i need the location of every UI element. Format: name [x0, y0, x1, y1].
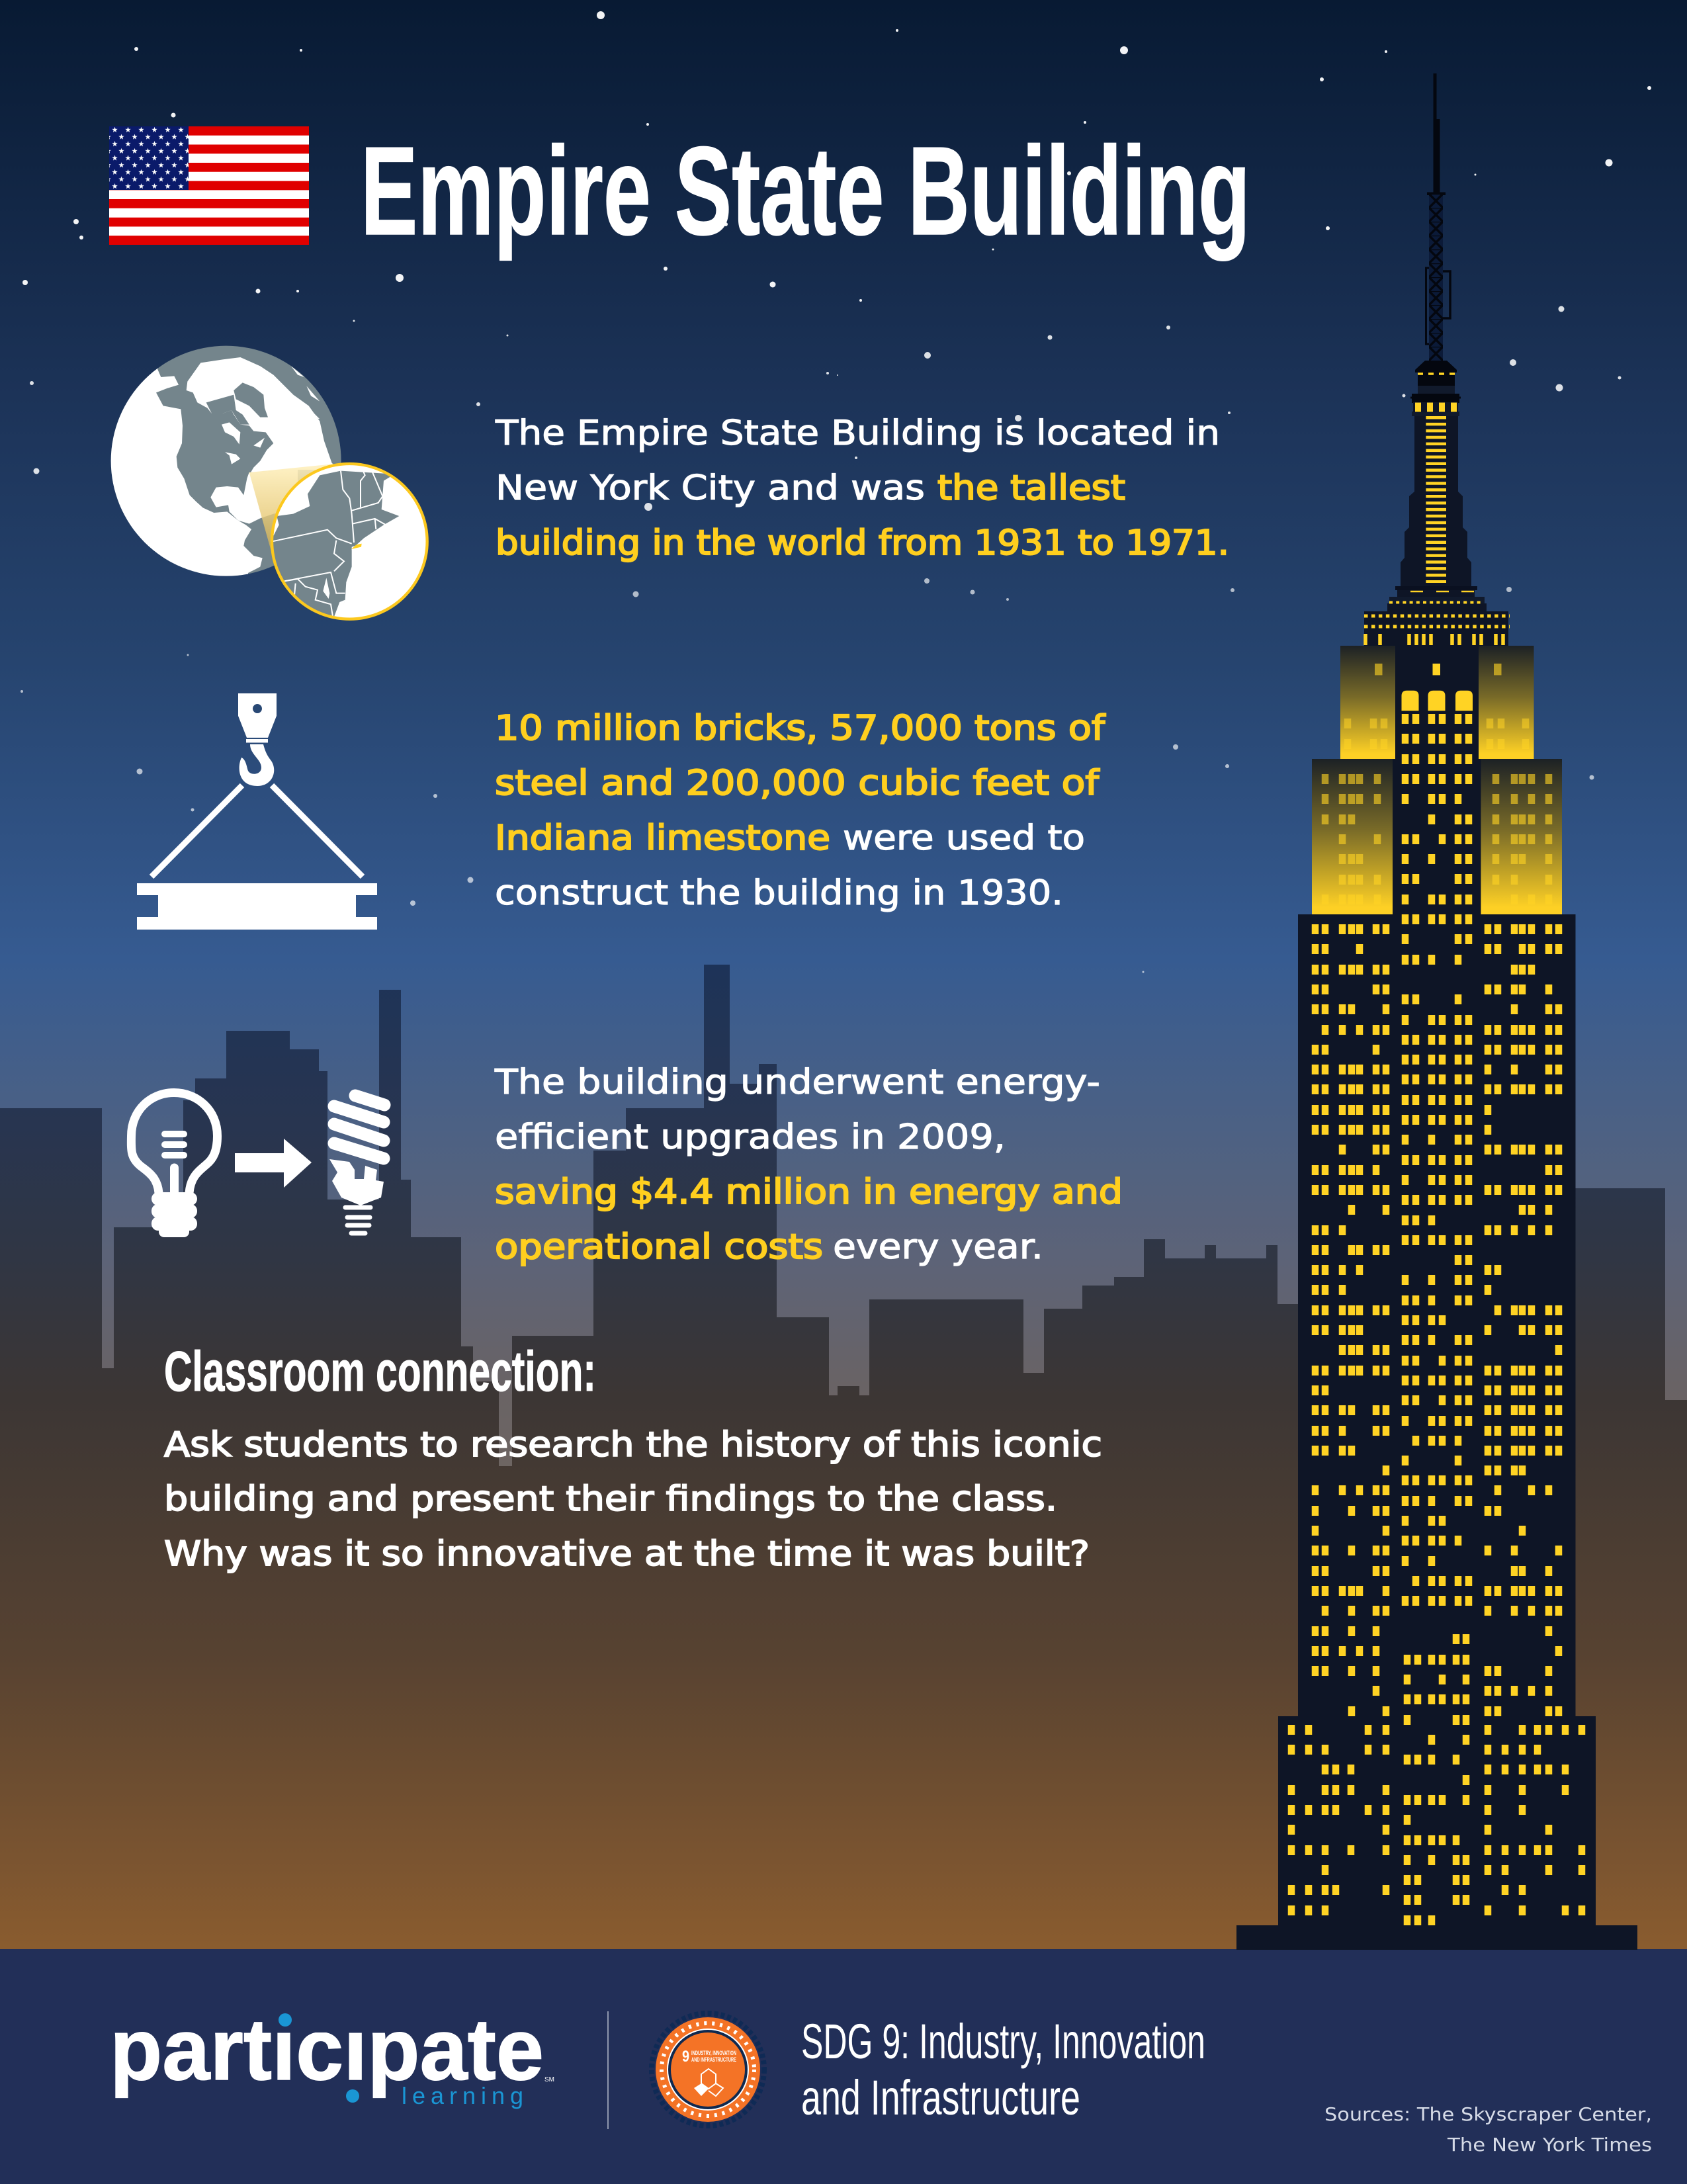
gold-lit setback tiers	[1312, 645, 1562, 915]
text: energy fact: saving $4.4 million in energy and	[495, 1172, 1123, 1212]
text: materials fact: were used to	[843, 818, 1085, 858]
icon: globe with magnified north-east USA	[99, 337, 427, 629]
text: classroom prompt: building and present their findings to the class.	[164, 1479, 1057, 1519]
text: classroom prompt: Why was it so innovative at the time it was built?	[164, 1534, 1090, 1574]
icon: incandescent bulb	[131, 1093, 217, 1237]
icon: incandescent bulb, arrow, CFL bulb	[131, 1093, 384, 1237]
globe	[111, 345, 341, 576]
inset map circle	[270, 462, 429, 621]
lit windows: upper central column	[1405, 714, 1469, 1606]
text: location fact: The Empire State Building is located in	[495, 414, 1220, 453]
text: sources: The New York Times	[1447, 2134, 1652, 2156]
text: classroom prompt: Ask students to research the history of this iconic	[164, 1425, 1102, 1465]
text: energy fact: The building underwent energy-	[494, 1063, 1100, 1102]
text: materials fact: Indiana limestone	[495, 818, 830, 858]
yellow zoom cone	[249, 464, 331, 551]
title: Empire State Building	[361, 121, 1250, 261]
lit windows: shaft left wing	[1315, 924, 1386, 1716]
text: materials fact: construct the building in 1930.	[495, 873, 1063, 913]
lit windows: base tier	[1291, 1725, 1582, 1915]
badge: SDG 9: AND INFRASTRUCTURE	[691, 2056, 736, 2063]
text: materials fact: 10 million bricks, 57,000 tons of	[495, 709, 1106, 748]
antenna spire	[1415, 73, 1457, 386]
lit windows: shaft right wing	[1488, 924, 1559, 1716]
text: sources: Sources: The Skyscraper Center,	[1324, 2103, 1652, 2125]
text: SDG 9 label: and Infrastructure	[801, 2070, 1080, 2125]
logo: participate learning: SM	[544, 2076, 554, 2083]
icon: CFL bulb	[329, 1096, 384, 1233]
text: energy fact: operational costs	[495, 1227, 823, 1267]
text: location fact: the tallest	[937, 468, 1125, 508]
text: classroom prompt	[164, 1425, 1102, 1574]
badge: SDG 9	[652, 2013, 764, 2126]
text: energy fact	[494, 1063, 1123, 1267]
icon: American flag	[109, 126, 309, 245]
logo: participate learning: participate	[110, 2001, 544, 2098]
badge: SDG 9: 9	[682, 2048, 689, 2066]
text: location fact	[495, 414, 1229, 563]
heading: classroom connection: Classroom connection:	[164, 1340, 596, 1403]
arrow	[235, 1139, 312, 1188]
text: materials fact: steel and 200,000 cubic feet of	[495, 764, 1100, 803]
text: SDG 9 label	[801, 2014, 1205, 2125]
divider	[607, 2011, 609, 2129]
arched and top central windows	[1401, 664, 1473, 711]
logo: participate learning: learning	[402, 2082, 523, 2109]
Empire State Building illustration	[1236, 73, 1637, 1950]
lit windows: lower central column	[1407, 1634, 1466, 1925]
text: location fact: New York City and was	[496, 468, 925, 508]
tower top with lit stripes	[1364, 374, 1510, 646]
icon: crane hook lifting a steel beam	[137, 693, 377, 930]
stars	[21, 11, 1651, 973]
main shaft and base	[1236, 914, 1637, 1950]
footer band	[0, 1949, 1687, 2184]
text: sources	[1324, 2103, 1652, 2156]
text: location fact: building in the world from 1931 to 1971.	[496, 523, 1229, 563]
text: SDG 9 label: SDG 9: Industry, Innovation	[801, 2014, 1205, 2069]
text: energy fact: efficient upgrades in 2009,	[495, 1117, 1006, 1157]
badge: SDG 9: INDUSTRY, INNOVATION	[691, 2050, 736, 2056]
city skyline silhouette	[0, 965, 1687, 1949]
text: materials fact	[495, 709, 1106, 913]
text: energy fact: every year.	[833, 1227, 1043, 1267]
